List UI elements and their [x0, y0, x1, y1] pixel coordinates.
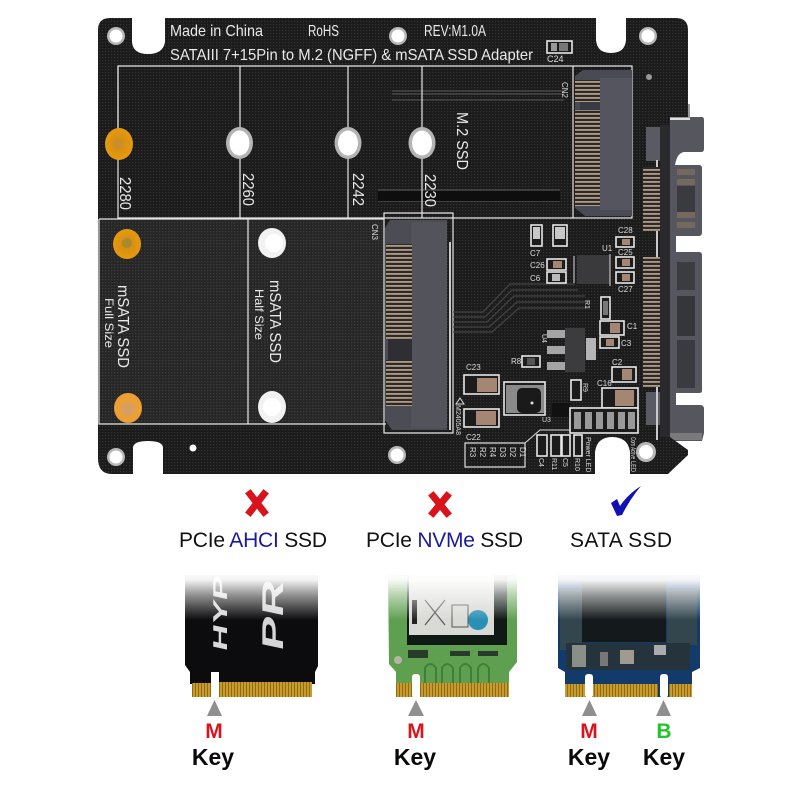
PCB body: [98, 18, 688, 474]
resistor LED label box: R2: [478, 447, 487, 458]
B key letter: B: [656, 720, 672, 743]
rotated size labels: 2280: [116, 177, 133, 210]
rotated size labels: mSATA SSD: [266, 280, 283, 363]
surface mount components: [456, 225, 638, 456]
rotated size labels: Full Size: [102, 298, 116, 348]
capacitor C24: [547, 41, 572, 53]
component reference labels: C6: [530, 274, 541, 283]
key arrow: [408, 700, 424, 716]
component reference labels: U1: [602, 244, 613, 253]
B key arrow: [656, 700, 671, 716]
rotated size labels: mSATA SSD: [114, 285, 131, 368]
resistor LED label box: [465, 430, 570, 467]
column: PCIe AHCI SSD: [175, 494, 327, 770]
SSD photo: [175, 570, 318, 698]
component reference labels: U3: [542, 417, 551, 424]
M key arrow: [582, 700, 597, 716]
cross mark: [433, 496, 447, 513]
SSD photo: HYP: [210, 573, 232, 653]
rotated size labels: [102, 112, 470, 368]
component reference labels: CN2: [560, 82, 569, 99]
M.2 traces: [378, 91, 564, 201]
board header text: RoHS: [308, 23, 339, 40]
SSD photo: [364, 570, 524, 698]
component reference labels: C3: [621, 339, 632, 348]
M.2 connector CN2: [575, 70, 632, 216]
component reference labels: C16: [597, 379, 612, 388]
silkscreen outlines: [99, 66, 632, 433]
key letter: M: [407, 720, 425, 743]
component reference labels: C22: [466, 433, 481, 442]
component reference labels: CN3: [370, 224, 379, 241]
component reference labels: C27: [618, 285, 633, 294]
key letter: M: [205, 720, 223, 743]
column: PCIe NVMe SSD: [364, 496, 524, 770]
heading: PCIe AHCI SSD: [179, 529, 327, 552]
rotated size labels: 2230: [421, 174, 438, 207]
heading: PCIe NVMe SSD: [366, 529, 523, 552]
component reference labels: C25: [618, 248, 633, 257]
key arrow: [207, 700, 222, 716]
M key label: Key: [568, 744, 610, 770]
component reference labels: Power LED: [584, 437, 591, 472]
board header text: SATAIII 7+15Pin to M.2 (NGFF) & mSATA SSD Adapter: [170, 47, 534, 64]
SSD photo: [552, 570, 706, 698]
SATA connector right housing: [668, 104, 704, 441]
mSATA connector CN3: [385, 220, 451, 430]
component reference labels: LED: [629, 461, 636, 472]
board header text: REV:M1.0A: [424, 23, 486, 40]
mSATA and M.2 panel shading: [100, 66, 573, 424]
heading: SATA SSD: [570, 529, 672, 552]
component reference labels: R10: [573, 458, 580, 471]
component reference labels: R11: [550, 458, 557, 470]
component reference labels: C1: [627, 322, 638, 331]
resistor LED label box: R3: [468, 447, 477, 458]
M key letter: M: [580, 720, 598, 743]
component reference labels: R1: [583, 300, 590, 309]
brass standoffs: [105, 128, 142, 423]
component reference labels: C4: [537, 458, 544, 467]
resistor LED label box: D3: [498, 447, 507, 458]
rotated size labels: M.2 SSD: [453, 112, 470, 170]
check mark: [611, 486, 641, 516]
signal traces: [453, 284, 590, 332]
component reference labels: C24: [547, 54, 564, 64]
component reference labels: R8: [511, 357, 522, 366]
component reference labels: C23: [466, 363, 481, 372]
component reference labels: Com Active: [629, 437, 636, 459]
rotated size labels: 2260: [239, 173, 256, 206]
component reference labels: C26: [530, 261, 545, 270]
board header text: Made in China: [170, 23, 263, 40]
component reference labels: U4: [540, 334, 547, 343]
rotated size labels: Half Size: [252, 289, 266, 340]
resistor LED label box: D1: [518, 447, 527, 458]
component reference labels: C28: [618, 226, 633, 235]
component reference labels: [370, 54, 638, 472]
component reference labels: M2405A8: [454, 405, 461, 435]
cross mark: [250, 494, 264, 512]
key label: Key: [394, 744, 436, 770]
component reference labels: C5: [561, 458, 568, 467]
component reference labels: C7: [530, 249, 541, 258]
SATA connector pins and block: [643, 125, 670, 440]
resistor LED label box: D2: [508, 447, 517, 458]
SSD photo: PR: [257, 576, 290, 653]
key label: Key: [192, 744, 234, 770]
component reference labels: C2: [612, 358, 623, 367]
B key label: Key: [643, 744, 685, 770]
column: SATA SSD: [552, 486, 706, 770]
board header text: [170, 23, 534, 64]
adapter board: [98, 18, 704, 474]
component reference labels: R9: [581, 383, 588, 392]
standoff holes white: [226, 127, 436, 423]
rotated size labels: 2242: [349, 173, 366, 206]
resistor LED label box: R4: [488, 447, 497, 458]
mounting holes: [107, 27, 657, 466]
